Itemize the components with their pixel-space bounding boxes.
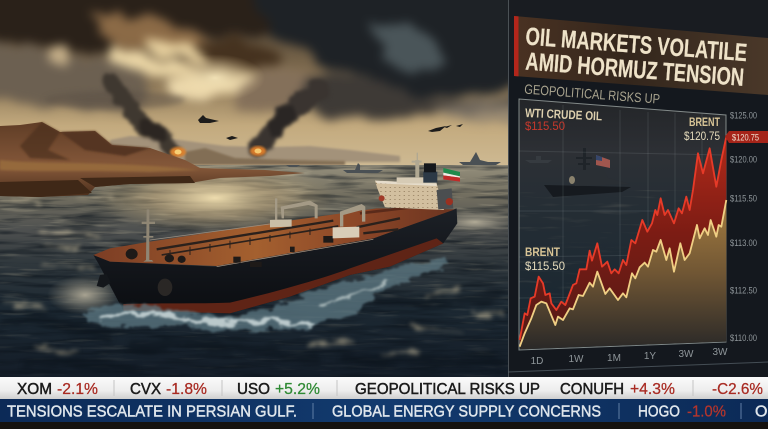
ticker: stock quotes: -1.8%: [166, 381, 207, 398]
ticker: stock quotes: -2.1%: [57, 381, 98, 398]
panel: chart plot: [519, 99, 726, 350]
x axis labels: [531, 347, 728, 367]
distant warships: [286, 152, 501, 173]
smoke plumes and fires: [112, 82, 320, 157]
x axis labels: 1W: [568, 354, 584, 365]
ticker: stock quotes: XOM: [17, 381, 52, 398]
x axis labels: 1Y: [644, 351, 656, 362]
hull: [93, 208, 457, 313]
y axis labels: $120.00: [730, 154, 757, 166]
y axis labels: $110.00: [730, 333, 757, 344]
deck pipe rack: [150, 207, 417, 267]
headline text: [525, 23, 748, 92]
x axis labels: 1D: [531, 356, 543, 367]
ticker: stock quotes: [0, 377, 768, 399]
forward mast: [142, 209, 155, 262]
gold area: [520, 200, 726, 349]
oil tanker: [93, 153, 460, 313]
fighter jets: [198, 115, 463, 140]
ticker: stock quotes: +5.2%: [275, 381, 320, 398]
ticker: stock quotes: CVX: [130, 381, 161, 398]
panel: market chart backdrop: [508, 0, 768, 378]
Brent lower label: [525, 247, 565, 273]
storm clouds: [0, 0, 530, 125]
midship cranes and deckhouse: [270, 198, 365, 238]
x axis labels: 3W: [678, 349, 694, 360]
Brent upper label: [684, 117, 720, 143]
x axis labels: 3W: [712, 347, 728, 358]
ticker: news headlines: [0, 399, 768, 429]
deck machinery at bow: [126, 236, 333, 267]
ticker: news headlines: HOGO: [638, 404, 680, 420]
ticker: stock quotes: GEOPOLITICAL RISKS UP: [355, 381, 540, 398]
grid lines: [520, 105, 722, 302]
red waterline: [123, 238, 443, 313]
US flag on warship: [596, 155, 610, 168]
wave crests: [7, 198, 503, 367]
distant hills: [110, 136, 400, 165]
ticker: stock quotes: +4.3%: [630, 381, 675, 398]
red line: [520, 137, 726, 340]
tanker flag: [443, 168, 460, 182]
subheading: GEOPOLITICAL RISKS UP: [524, 82, 661, 107]
y axis labels: $115.50: [730, 194, 757, 204]
Brent upper label: $120.75: [684, 129, 720, 143]
price tag: $120.75: [732, 132, 759, 144]
red area: [520, 137, 726, 347]
sky background: [0, 0, 510, 180]
ticker: stock quotes: -C2.6%: [712, 381, 763, 398]
WTI label: WTI CRUDE OIL: [525, 106, 603, 123]
gold line: [520, 200, 726, 347]
Brent lower label: $115.50: [525, 259, 565, 273]
ticker: news headlines: -1.0%: [687, 404, 726, 420]
sea: [0, 162, 515, 377]
bridge superstructure: [375, 153, 453, 210]
headline banner: [514, 16, 768, 95]
x axis labels: 1M: [607, 353, 621, 364]
WTI label: $115.50: [525, 119, 565, 133]
Brent lower label: BRENT: [525, 247, 560, 259]
y axis labels: $125.00: [730, 110, 757, 122]
ticker: stock quotes: CONUFH: [560, 381, 624, 398]
ticker: news headlines: TENSIONS ESCALATE IN PERSIAN GULF.: [7, 404, 297, 420]
ticker: stock quotes: USO: [237, 381, 270, 398]
bow anchor: [97, 274, 111, 288]
y axis labels: $112.50: [730, 286, 757, 296]
y axis labels: $113.00: [730, 238, 757, 249]
bow wake foam: [83, 258, 450, 332]
ticker: news headlines: GLOBAL ENERGY SUPPLY CONCERNS: [332, 404, 601, 420]
WTI label: [525, 106, 603, 133]
Brent upper label: BRENT: [689, 117, 720, 129]
price chart: red and gold series: [520, 137, 726, 349]
y axis labels: [730, 110, 757, 344]
background warship: [525, 148, 631, 197]
left coastline headland: [0, 122, 305, 197]
deck: [93, 208, 455, 266]
